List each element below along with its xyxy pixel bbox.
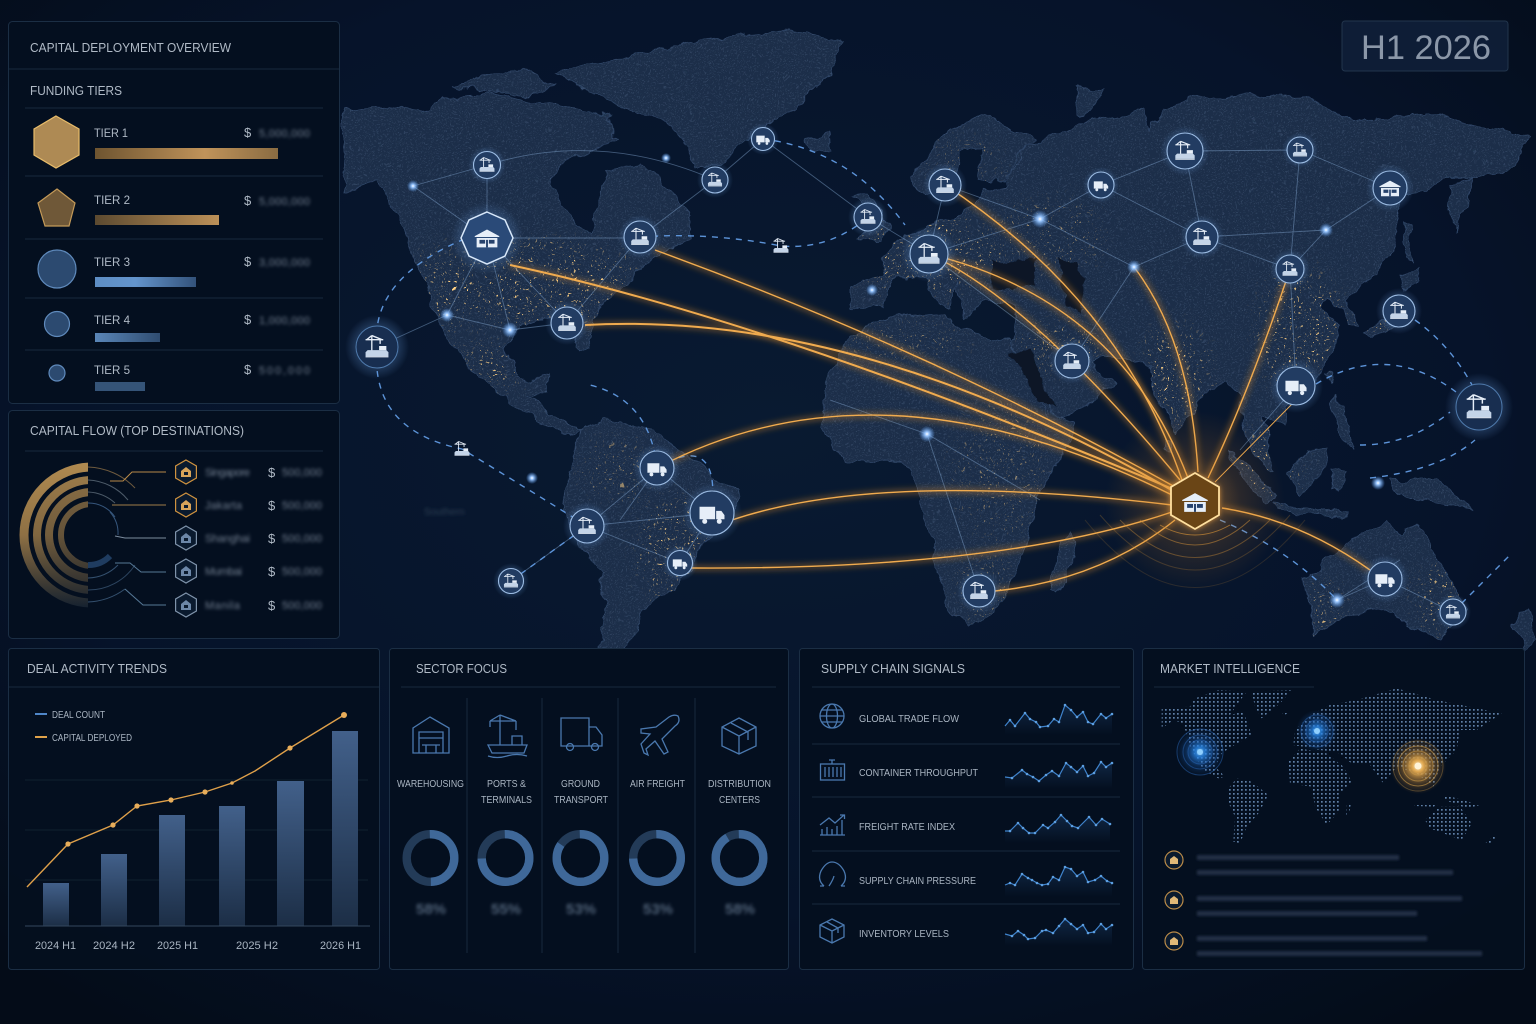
tier 4 row: 1,000,000	[259, 315, 310, 327]
sector: ports and terminals: PORTS &	[487, 778, 526, 790]
sector: ports and terminals: TERMINALS	[481, 794, 532, 806]
signal: container throughput	[820, 760, 1112, 789]
sector: warehousing: 58%	[416, 901, 446, 918]
node: Central Asia	[1180, 215, 1224, 259]
destination row 3	[176, 526, 322, 550]
sector: distribution centers	[708, 718, 771, 918]
destination row 4: Mumbai	[205, 566, 242, 578]
heading: funding tiers: FUNDING TIERS	[30, 83, 122, 98]
icon: Atlantic ship	[774, 239, 788, 253]
node: Sydney	[1435, 594, 1471, 630]
panel: capital flow	[8, 410, 340, 638]
destination row 5	[176, 593, 322, 617]
tier 4 row: $	[244, 312, 252, 327]
signal: freight rate index	[820, 815, 1110, 843]
sector: ports and terminals	[481, 715, 532, 918]
destination row 5: $	[268, 598, 276, 613]
tier 1 row: 5,000,000	[259, 128, 310, 140]
node: gold capital hub	[1171, 473, 1219, 529]
map: network routes	[377, 139, 1453, 612]
tier 5 row: $	[244, 362, 252, 377]
node: UK	[848, 197, 888, 237]
tier 3 row: TIER 3	[94, 255, 130, 269]
bar and line chart: 2025 H1	[157, 940, 198, 952]
node: Peru	[563, 502, 611, 550]
node: Chile	[493, 563, 529, 599]
bar and line chart	[25, 712, 370, 952]
node: North America hub warehouse	[451, 202, 523, 274]
signal: global trade flow: GLOBAL TRADE FLOW	[859, 713, 959, 725]
destination row 5: Manila	[205, 600, 241, 612]
destination row 3: $	[268, 531, 276, 546]
panel: capital deployment overview	[8, 22, 340, 404]
sector: air freight	[630, 715, 685, 918]
sector: warehousing	[397, 717, 464, 918]
signal: inventory levels	[820, 919, 1112, 946]
tier 4 row	[44, 312, 310, 342]
intel item 1	[1165, 851, 1453, 875]
node: Venezuela truck	[633, 444, 681, 492]
hotspot: Europe	[1296, 710, 1338, 752]
destination row 1: Singapore	[205, 467, 250, 479]
sector: ground transport: 53%	[566, 901, 596, 918]
map: glowing points	[407, 153, 1385, 608]
panel: supply chain signals	[800, 648, 1134, 970]
heading: market intelligence: MARKET INTELLIGENCE	[1160, 661, 1300, 676]
chart legend	[35, 710, 132, 744]
sector: ground transport	[554, 718, 608, 918]
sector: air freight: 53%	[643, 901, 673, 918]
tier 5 row: 500,000	[259, 365, 310, 377]
destination row 3: Shanghai	[205, 533, 250, 545]
tier 5 row	[49, 362, 310, 391]
signal: container throughput: CONTAINER THROUGHPUT	[859, 767, 978, 779]
bar and line chart: 2024 H1	[35, 940, 76, 952]
icon: Pacific ship south	[455, 442, 469, 456]
sector: ground transport: GROUND	[561, 778, 600, 790]
destination row 1	[176, 460, 322, 484]
node: Sao Paulo	[662, 545, 698, 581]
world map	[340, 20, 1536, 650]
signal: supply chain pressure: SUPPLY CHAIN PRESSURE	[859, 875, 976, 887]
leader lines	[110, 472, 166, 605]
heading: sector focus: SECTOR FOCUS	[416, 661, 507, 676]
destination row 2: Jakarta	[205, 500, 243, 512]
destination row 5: 500,000	[282, 600, 322, 612]
hotspot: North America	[1176, 728, 1224, 776]
destination row 1: 500,000	[282, 467, 322, 479]
node: Canada west	[468, 146, 506, 184]
tier 1 row: $	[244, 125, 252, 140]
heading: deal activity: DEAL ACTIVITY TRENDS	[27, 661, 167, 676]
signal: freight rate index: FREIGHT RATE INDEX	[859, 821, 955, 833]
destination row 4: 500,000	[282, 566, 322, 578]
node: Japan	[1376, 288, 1422, 334]
node: Labrador	[697, 162, 733, 198]
radial ring chart	[24, 467, 160, 603]
node: Brazil	[682, 483, 742, 543]
hub glow: southeast Asia rings	[1085, 411, 1305, 591]
node: Greenland	[747, 123, 779, 155]
sector: ground transport: TRANSPORT	[554, 794, 608, 806]
sector: ports and terminals: 55%	[491, 901, 521, 918]
map: continents with city lights	[340, 20, 1536, 650]
bar and line chart: 2026 H1	[320, 940, 361, 952]
node: Central Europe	[901, 226, 957, 282]
node: South Africa	[957, 569, 1001, 613]
tier 1 row	[34, 116, 310, 168]
heading: capital flow: CAPITAL FLOW (TOP DESTINATIONS)	[30, 423, 244, 438]
node: Pacific ship	[345, 315, 409, 379]
node: Russia west	[1083, 167, 1119, 203]
panel: market intelligence	[1142, 648, 1524, 970]
bar and line chart: 2024 H2	[93, 940, 135, 952]
sector: air freight: AIR FREIGHT	[630, 778, 685, 790]
node: Pacific ship east	[1445, 373, 1513, 441]
tier 2 row: 5,000,000	[259, 196, 310, 208]
heading: capital deployment overview: CAPITAL DEPLOYMENT OVERVIEW	[30, 40, 232, 55]
node: Far East warehouse	[1366, 164, 1414, 212]
intel item 2	[1165, 891, 1462, 916]
dotted world map	[1162, 689, 1502, 843]
tier 1 row: TIER 1	[94, 126, 128, 140]
tier 2 row	[38, 189, 310, 226]
tier 2 row: TIER 2	[94, 193, 130, 207]
node: Russia east	[1282, 132, 1318, 168]
destination row 4	[176, 559, 322, 583]
node: China south truck	[1269, 359, 1323, 413]
destination row 4: $	[268, 564, 276, 579]
period badge: H1 2026	[1361, 29, 1491, 67]
node: China north	[1270, 249, 1310, 289]
destination row 3: 500,000	[282, 533, 322, 545]
tier 4 row: TIER 4	[94, 313, 130, 327]
destination row 2	[176, 493, 322, 517]
heading: supply chain signals: SUPPLY CHAIN SIGNALS	[821, 661, 965, 676]
tier 5 row: TIER 5	[94, 363, 130, 377]
signal: supply chain pressure	[820, 862, 1112, 897]
map: gold capital flows	[510, 185, 1370, 591]
signal: inventory levels: INVENTORY LEVELS	[859, 928, 949, 940]
hotspot: Asia	[1390, 738, 1446, 794]
tier 3 row	[38, 250, 310, 288]
node: Gulf states	[1049, 338, 1095, 384]
bar and line chart: 2025 H2	[236, 940, 278, 952]
tier 2 row: $	[244, 193, 252, 208]
panel: deal activity trends	[8, 648, 380, 970]
intel item 3	[1165, 932, 1482, 956]
node: Russia central	[1160, 126, 1210, 176]
node: Scandinavia	[923, 163, 967, 207]
node: Montreal port	[618, 215, 662, 259]
tier 3 row: $	[244, 254, 252, 269]
destination row 2: 500,000	[282, 500, 322, 512]
sector: distribution centers: 58%	[725, 901, 755, 918]
node: Australia	[1361, 555, 1409, 603]
signal: global trade flow	[820, 704, 1112, 735]
blurred ocean label: Southern	[424, 507, 465, 518]
destination row 1: $	[268, 465, 276, 480]
period badge	[1342, 21, 1508, 71]
tier 3 row: 3,000,000	[259, 257, 310, 269]
sector: distribution centers: DISTRIBUTION	[708, 778, 771, 790]
panel: sector focus	[390, 648, 788, 970]
chart legend: CAPITAL DEPLOYED	[52, 733, 132, 744]
sector: distribution centers: CENTERS	[719, 794, 760, 806]
sector: warehousing: WAREHOUSING	[397, 778, 464, 790]
node: Gulf port	[545, 301, 589, 345]
destination row 2: $	[268, 498, 276, 513]
chart legend: DEAL COUNT	[52, 710, 105, 721]
map: dashed shipping lanes	[377, 139, 1510, 612]
